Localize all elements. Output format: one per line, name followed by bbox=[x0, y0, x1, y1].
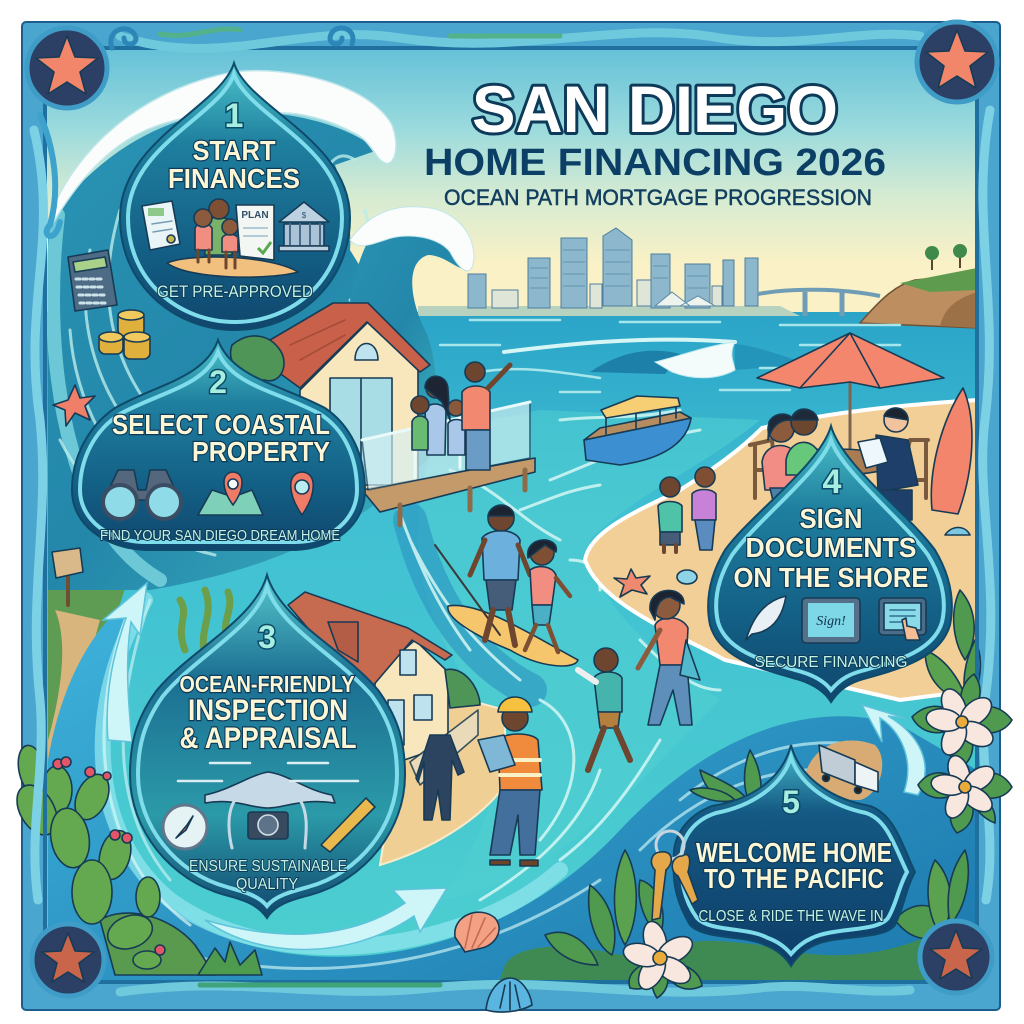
cactus fruit bbox=[53, 757, 165, 955]
magnolia flower upper right bbox=[912, 674, 1012, 770]
family on balcony bbox=[411, 362, 510, 470]
icon: compass bbox=[163, 805, 207, 849]
mother and child walking bbox=[578, 590, 700, 770]
arrow: upward flow bbox=[103, 583, 147, 742]
gold coins bbox=[99, 310, 150, 359]
title line 2: HOME FINANCING 2026 bbox=[424, 142, 886, 184]
title bbox=[424, 72, 886, 210]
arrow: return flow bbox=[862, 705, 925, 795]
icon: drone bbox=[178, 763, 358, 848]
step 3 number: 3 bbox=[258, 619, 276, 655]
step 2 number: 2 bbox=[209, 364, 227, 400]
umbrella table scene bbox=[750, 333, 944, 520]
icon: touch screen bbox=[879, 598, 926, 640]
surfboard upright bbox=[931, 388, 972, 514]
panel: step 4 bbox=[708, 426, 952, 702]
table and chairs bbox=[750, 440, 928, 500]
shore near house 2 bbox=[380, 695, 505, 865]
sandy trail bbox=[48, 610, 100, 790]
step 2 rim bbox=[80, 352, 357, 542]
step 5 number: 5 bbox=[782, 784, 800, 820]
starfish left bbox=[53, 385, 95, 426]
cliff headland bbox=[860, 244, 977, 328]
step 4 caption: SECURE FINANCING bbox=[754, 654, 908, 671]
seaweed behind drop 3 bbox=[180, 590, 230, 655]
step 4 rim bbox=[716, 440, 944, 690]
step 3 caption line 1: ENSURE SUSTAINABLE bbox=[189, 858, 347, 875]
inspector worker bbox=[478, 697, 542, 866]
icon: binoculars bbox=[103, 470, 181, 519]
step 1 rim bbox=[128, 74, 342, 322]
step 3 rim bbox=[138, 587, 397, 906]
icon: feather bbox=[746, 596, 786, 640]
step 1 caption: GET PRE-APPROVED bbox=[157, 282, 313, 301]
left bank bbox=[48, 530, 150, 790]
icon: location pin bbox=[291, 472, 313, 515]
big swirl around step 3 bbox=[48, 585, 977, 984]
glass doors bbox=[330, 378, 392, 485]
icon: signature tablet bbox=[802, 598, 860, 643]
magnolia flower lower right bbox=[918, 753, 1012, 833]
bottom foliage bbox=[500, 750, 977, 980]
scallop shell bbox=[455, 912, 499, 952]
wetsuit bbox=[416, 735, 464, 820]
boat bbox=[584, 396, 691, 465]
second wave bbox=[345, 207, 474, 420]
title line 1: SAN DIEGO bbox=[472, 72, 838, 146]
magnolia flower bottom bbox=[621, 919, 702, 998]
step 3 caption line 2: QUALITY bbox=[236, 876, 298, 893]
big wave foam crest bbox=[50, 71, 396, 225]
step 1 heading line 1: START bbox=[192, 135, 276, 166]
step 2 droplet bbox=[72, 340, 365, 550]
corner star top-right bbox=[917, 22, 997, 102]
corner star top-left bbox=[27, 28, 107, 108]
step 3 heading line 1: OCEAN-FRIENDLY bbox=[180, 671, 354, 697]
corner star bottom-left bbox=[32, 924, 104, 996]
paddle boarders bbox=[435, 505, 578, 666]
children on beach bbox=[658, 467, 716, 552]
sky bbox=[45, 46, 977, 318]
step 4 heading line 1: SIGN bbox=[800, 503, 862, 534]
deck bbox=[362, 458, 535, 512]
step 1 number: 1 bbox=[225, 97, 243, 135]
step 5 caption: CLOSE & RIDE THE WAVE IN bbox=[698, 908, 884, 925]
bush by house bbox=[231, 336, 284, 381]
icon: checklist document bbox=[142, 201, 180, 250]
calculator bbox=[68, 250, 117, 311]
bridge bbox=[758, 290, 880, 316]
big wave body bbox=[48, 112, 455, 590]
step 4 heading line 3: ON THE SHORE bbox=[734, 562, 928, 593]
couple and agent bbox=[762, 408, 918, 520]
step 3 heading line 2: INSPECTION bbox=[188, 694, 348, 727]
beach sand bbox=[585, 400, 977, 700]
step 1 droplet bbox=[120, 63, 350, 330]
step 5 heading line 2: TO THE PACIFIC bbox=[704, 863, 884, 894]
panel: step 3 bbox=[130, 575, 405, 918]
subtitle: OCEAN PATH MORTGAGE PROGRESSION bbox=[444, 185, 872, 210]
ocean bbox=[45, 312, 977, 984]
pebble bbox=[677, 570, 697, 584]
step 1 heading line 2: FINANCES bbox=[168, 163, 300, 194]
glass balcony rail bbox=[362, 402, 530, 490]
step 5 rim bbox=[682, 757, 907, 954]
city skyline bbox=[418, 228, 800, 316]
step 2 heading line 2: PROPERTY bbox=[192, 436, 330, 467]
icon: family on surfboard bbox=[167, 199, 298, 277]
step 4 number: 4 bbox=[823, 463, 842, 501]
house 1 with balcony bbox=[270, 303, 535, 525]
panel: step 1 bbox=[120, 63, 350, 330]
icon: plan document bbox=[236, 205, 274, 260]
step 3 heading line 3: & APPRAISAL bbox=[180, 722, 356, 755]
umbrella bbox=[757, 333, 944, 480]
window bbox=[355, 344, 378, 360]
panel: step 5 bbox=[651, 745, 915, 966]
cactus bbox=[9, 743, 215, 975]
walls bbox=[300, 322, 418, 490]
panel: step 2 bbox=[72, 340, 365, 550]
vertical leaves right bbox=[925, 590, 980, 705]
delivery truck bbox=[805, 740, 882, 800]
starfish on beach bbox=[614, 569, 650, 597]
wooden sign bbox=[52, 548, 83, 605]
icon: bank bbox=[279, 202, 329, 251]
icon: plan document: PLAN bbox=[241, 210, 269, 221]
icon: ruler bbox=[321, 798, 375, 852]
middle river swirl bbox=[395, 410, 760, 900]
roof bbox=[270, 303, 430, 388]
icon: bank: $ bbox=[302, 211, 307, 220]
step 4 heading line 2: DOCUMENTS bbox=[746, 532, 916, 563]
distant breaking wave bbox=[440, 320, 900, 392]
step 5 droplet bbox=[674, 745, 915, 966]
step 2 caption: FIND YOUR SAN DIEGO DREAM HOME bbox=[100, 527, 340, 544]
blue shell bbox=[945, 528, 970, 535]
arrow: rightward flow bbox=[205, 888, 447, 950]
icon: camera bbox=[248, 812, 288, 839]
icon: signature tablet: Sign! bbox=[816, 614, 846, 629]
icon: house keys bbox=[651, 831, 698, 920]
step 3 droplet bbox=[130, 575, 405, 918]
corner star bottom-right bbox=[920, 921, 992, 993]
step 5 heading line 1: WELCOME HOME bbox=[696, 837, 892, 868]
icon: map with pin bbox=[198, 472, 263, 515]
bottom centre scroll ornament bbox=[486, 978, 532, 1012]
step 4 droplet bbox=[708, 426, 952, 702]
step 2 heading line 1: SELECT COASTAL bbox=[112, 409, 330, 440]
house 2 bbox=[288, 592, 480, 785]
grass tuft bbox=[198, 942, 262, 975]
